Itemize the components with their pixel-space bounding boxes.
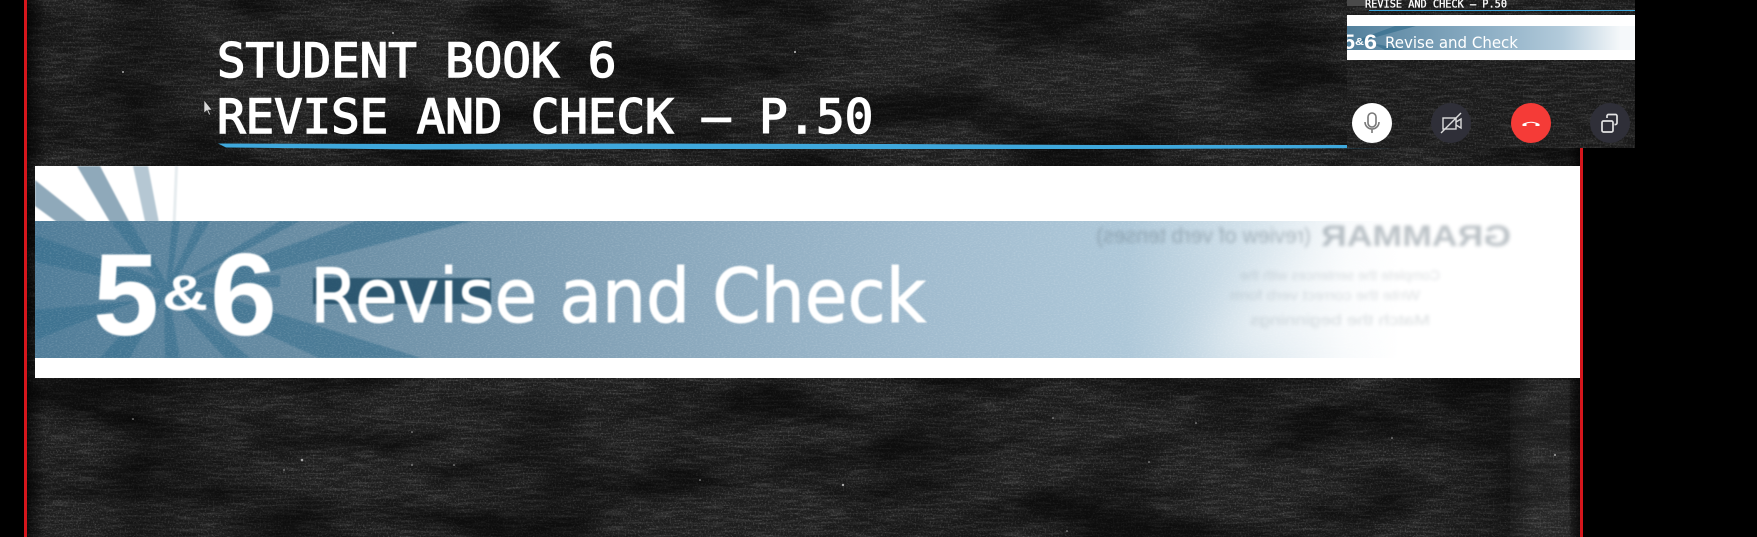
left red border: [24, 0, 27, 537]
banner heading: Revise and Check: [310, 252, 927, 340]
mouse cursor: [204, 100, 212, 115]
unit number: &: [162, 265, 208, 321]
sunburst rays above the band: [35, 166, 178, 221]
banner blue band: [35, 221, 1400, 358]
banner: scanned book header: [35, 166, 1580, 378]
unit number: 5: [93, 229, 159, 360]
ghosted mirrored print-through text: Match the beginnings: [1250, 312, 1430, 329]
right red border: [1580, 148, 1583, 537]
unit number: [93, 229, 277, 360]
title underline: [218, 144, 1407, 150]
sunburst rays inside the band: [35, 221, 472, 358]
ghosted mirrored print-through text: [1096, 220, 1511, 329]
ghosted mirrored print-through text: Write the correct verb form: [1230, 287, 1420, 303]
thumbnail underline: [1369, 10, 1635, 11]
thumbnail dark rays: [1360, 26, 1416, 50]
button: switch window: [1590, 103, 1630, 143]
title: REVISE AND CHECK – P.50: [217, 90, 873, 145]
button: microphone: [1352, 103, 1392, 143]
thumbnail unit number: [1347, 34, 1376, 49]
button: camera off: [1431, 103, 1471, 143]
thumbnail white strip: [1347, 15, 1635, 60]
ghosted mirrored print-through text: (review of verb tenses): [1096, 223, 1311, 248]
unit number: 6: [210, 229, 277, 360]
band paper grain: [35, 221, 1400, 358]
ghosted mirrored print-through text: GRAMMAR: [1321, 220, 1511, 253]
button: hang up: [1511, 103, 1551, 143]
banner white background: [35, 166, 1580, 378]
thumbnail grey patch: [1347, 0, 1366, 6]
band fade patch at lower right: [1190, 221, 1400, 358]
thumbnail unit number: 6: [1364, 31, 1377, 54]
ghosted mirrored print-through text: Complete the sentences with the: [1240, 267, 1440, 283]
thumbnail unit number: 5: [1343, 31, 1355, 54]
video call thumbnail panel: [1343, 0, 1635, 148]
thumbnail unit number: &: [1355, 37, 1364, 48]
title: [217, 34, 873, 145]
thumbnail heading: Revise and Check: [1385, 33, 1519, 52]
dark patch behind heading: [313, 278, 491, 304]
thumbnail blue band: [1347, 26, 1635, 50]
title: STUDENT BOOK 6: [217, 34, 616, 89]
thumbnail background: [1347, 0, 1635, 148]
